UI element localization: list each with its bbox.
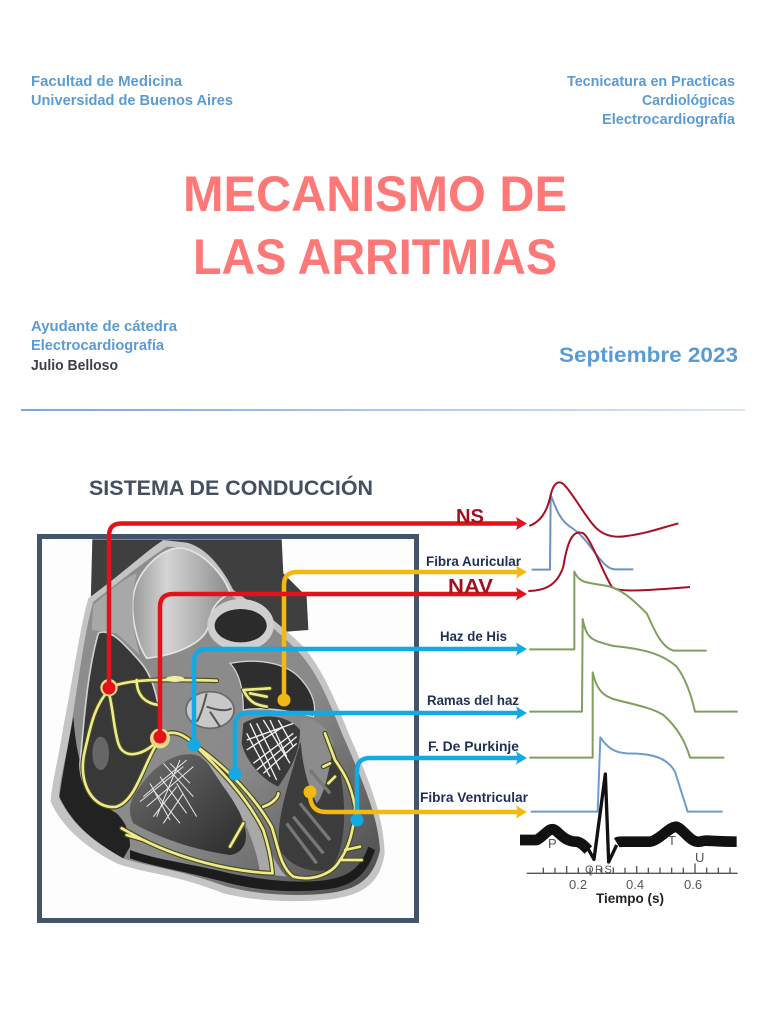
title	[183, 166, 567, 285]
left ventricle muscle	[300, 719, 333, 803]
ECG wave labels	[548, 833, 704, 892]
label: haz de his: Haz de His	[440, 628, 507, 644]
ECG axis	[527, 863, 738, 873]
lower left dark wall	[59, 717, 130, 858]
papillary trabeculae	[247, 720, 297, 780]
label: NAV: NAV	[448, 576, 494, 598]
header: programme	[567, 73, 736, 128]
action potential curves	[528, 482, 738, 812]
label: NS: NS	[456, 506, 484, 528]
leader: NS	[102, 517, 527, 694]
curve: nodo auriculoventricular	[528, 532, 690, 591]
ECG wave labels: T	[668, 833, 676, 848]
pulmonary artery lumen	[215, 609, 267, 642]
valve region	[143, 654, 245, 743]
ECG wave labels: P	[548, 836, 557, 851]
header: faculty: Universidad de Buenos Aires	[31, 92, 233, 109]
header: programme: Tecnicatura en Practicas	[567, 73, 735, 90]
author block: Electrocardiografía	[31, 337, 165, 354]
leader: ramas del haz	[228, 706, 527, 780]
bottom dark rim	[130, 847, 375, 891]
header: programme: Cardiológicas	[642, 92, 735, 109]
right ventricle	[130, 754, 246, 855]
right atrium chamber	[80, 632, 160, 807]
leader: fibra auricular	[278, 566, 527, 706]
curve: purkinje	[529, 672, 724, 758]
ECG wave labels: 0.6	[684, 877, 702, 892]
septum band	[197, 747, 287, 877]
aorta	[133, 548, 230, 658]
title: MECANISMO DE	[183, 166, 567, 222]
curve: nodo sinusal	[529, 482, 678, 537]
label: fibra ventricular: Fibra Ventricular	[420, 789, 529, 805]
fossa ovalis	[92, 737, 109, 770]
curve: fibra ventricular	[531, 737, 723, 812]
header: faculty	[31, 73, 233, 109]
leader: fibras de purkinje	[350, 752, 527, 826]
left ventricle highlights	[287, 770, 330, 863]
heart wall	[59, 547, 380, 895]
ECG wave labels: QRS	[585, 864, 613, 876]
label: fibra auricular: Fibra Auricular	[426, 553, 522, 569]
ECG wave labels: U	[695, 850, 704, 865]
section heading: sistema de conducción: SISTEMA DE CONDUCCIÓN	[89, 476, 373, 500]
header: faculty: Facultad de Medicina	[31, 73, 183, 90]
curve: haz de his	[529, 572, 707, 651]
header: programme: Electrocardiografía	[602, 111, 736, 128]
left atrium	[230, 661, 315, 717]
papillary muscle	[242, 717, 300, 787]
conduction system	[83, 676, 362, 878]
curve: fibra auricular	[532, 495, 633, 570]
pulmonary artery ring	[207, 599, 274, 651]
left ventricle	[279, 730, 344, 871]
author block	[31, 318, 178, 374]
valve leaflets	[197, 693, 232, 727]
author block: Julio Belloso	[31, 357, 118, 374]
ECG axis title: Tiempo (s)	[596, 890, 664, 906]
ECG trace	[520, 774, 738, 873]
author block: Ayudante de cátedra	[31, 318, 178, 335]
ECG wave labels: 0.4	[626, 877, 644, 892]
right ventricle trabeculae	[140, 760, 197, 823]
curve: ramas del haz	[529, 619, 738, 712]
date: Septiembre 2023	[559, 344, 738, 367]
label: f. de purkinje: F. De Purkinje	[428, 738, 519, 754]
aortic valve	[186, 692, 234, 728]
leader: haz de his	[188, 642, 527, 752]
leader: fibra ventricular	[304, 786, 527, 818]
heart illustration	[51, 539, 385, 901]
heart outer shell	[51, 540, 385, 901]
leader: NAV	[154, 588, 527, 744]
panel: heart illustration frame	[40, 536, 416, 920]
great vessels	[90, 539, 308, 633]
label: ramas del haz: Ramas del haz	[427, 692, 519, 708]
right atrial appendage	[92, 573, 140, 655]
title: LAS ARRITMIAS	[193, 229, 557, 285]
ECG wave labels: 0.2	[569, 877, 587, 892]
